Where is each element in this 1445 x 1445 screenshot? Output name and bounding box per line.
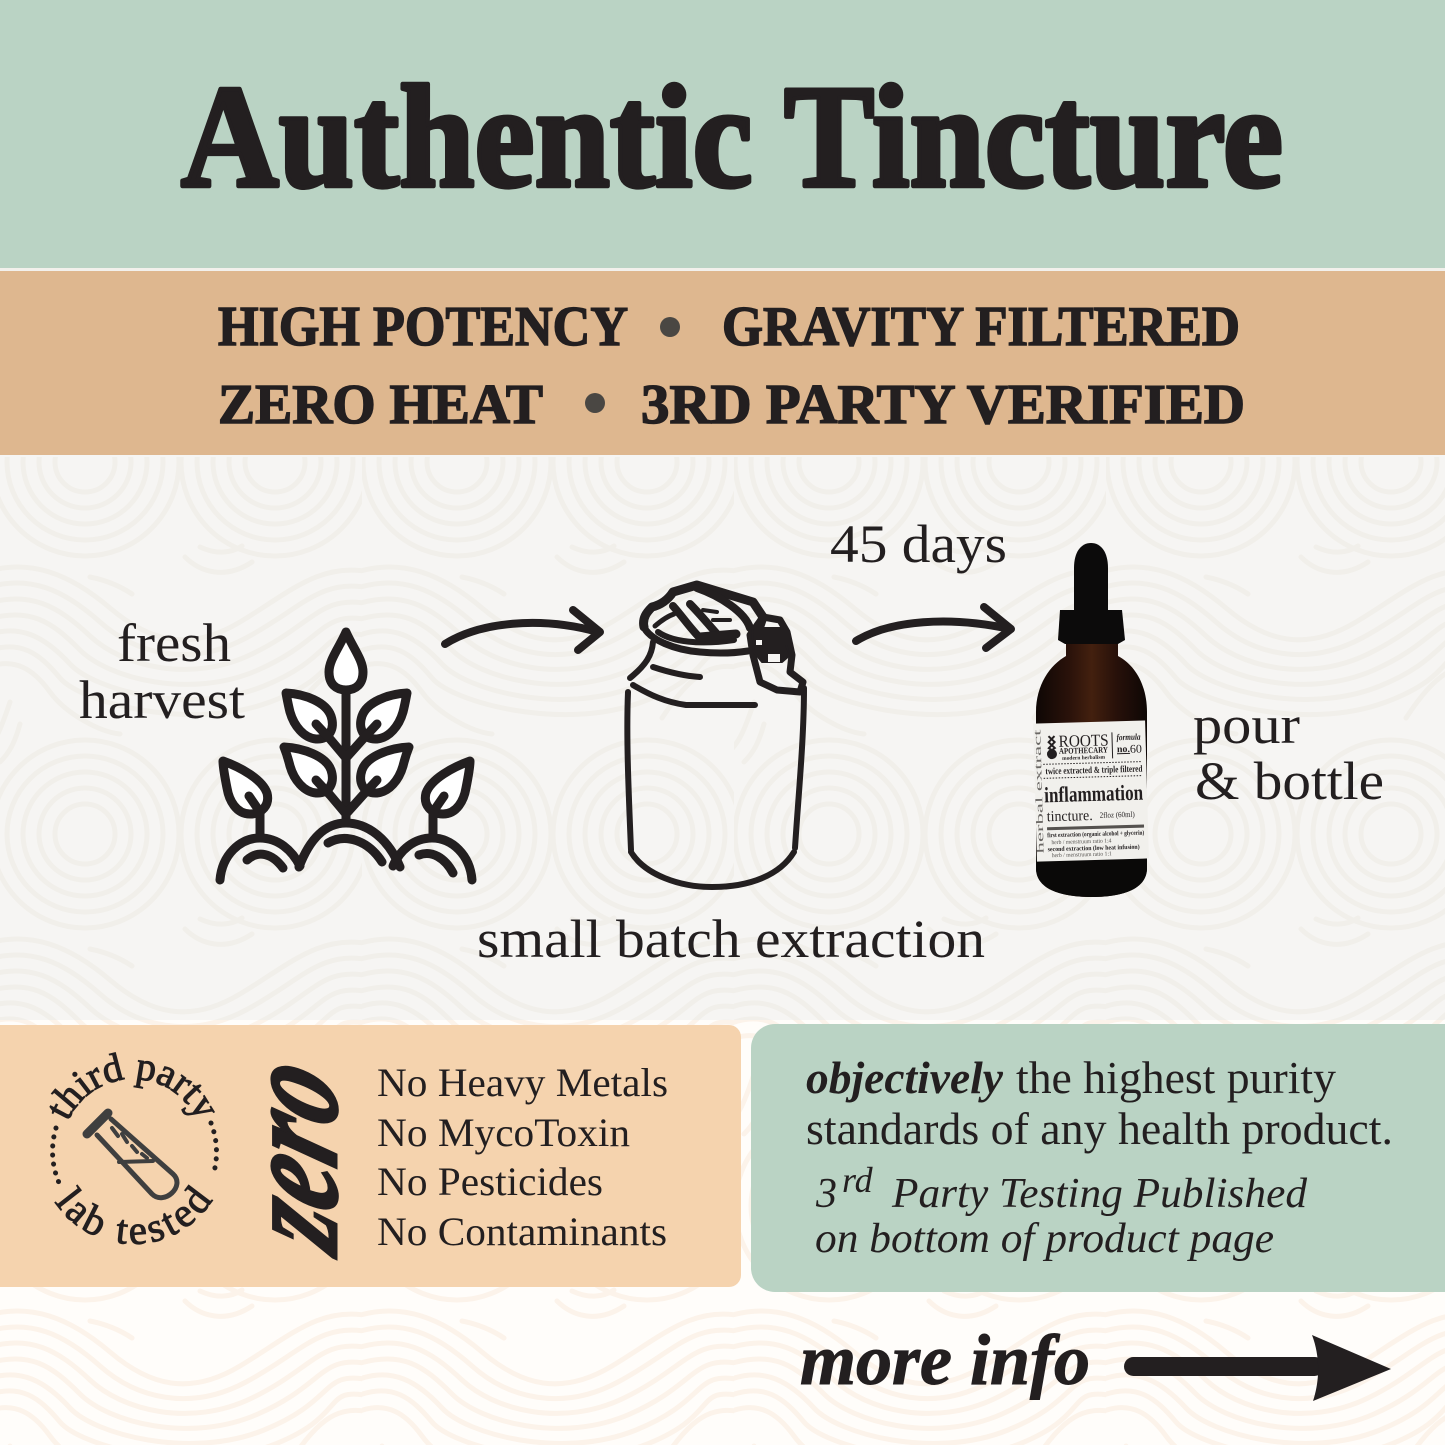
list: no contaminants: No Pesticides bbox=[377, 1159, 603, 1204]
panel: purity standards: on bottom of product page bbox=[815, 1216, 1274, 1262]
script word: zero: zero bbox=[216, 1039, 366, 1269]
band: product attributes: ZERO HEAT bbox=[218, 374, 543, 436]
list: no contaminants bbox=[377, 1060, 668, 1254]
product label: 60 bbox=[1130, 742, 1142, 756]
panel: purity standards bbox=[751, 1024, 1445, 1292]
list: no contaminants: No Heavy Metals bbox=[377, 1060, 668, 1105]
band: product attributes: GRAVITY FILTERED bbox=[722, 296, 1240, 358]
product label: tincture. bbox=[1047, 808, 1093, 825]
list: no contaminants: No Contaminants bbox=[377, 1209, 667, 1254]
label: fresh harvest: harvest bbox=[79, 670, 245, 730]
label: pour & bottle: pour bbox=[1193, 695, 1300, 755]
page background: process section bbox=[0, 455, 1445, 1445]
label: small batch extraction: small batch extraction bbox=[477, 909, 985, 969]
label: pour & bottle: & bottle bbox=[1195, 751, 1384, 811]
product label: no. bbox=[1117, 744, 1131, 755]
panel: zero contaminants bbox=[0, 1025, 741, 1287]
product label: formula bbox=[1116, 732, 1141, 742]
product label: herb / menstruum ratio 1:4 bbox=[1051, 838, 1112, 846]
arrow: more info bbox=[1124, 1335, 1391, 1401]
list: no contaminants: No MycoToxin bbox=[377, 1110, 630, 1155]
band: product attributes bbox=[0, 268, 1445, 455]
label: fresh harvest: fresh bbox=[117, 613, 231, 673]
panel: purity standards: the highest purity bbox=[1016, 1052, 1336, 1103]
product label: APOTHECARY bbox=[1059, 745, 1108, 756]
product label: ROOTS bbox=[1058, 731, 1109, 751]
product label: herb / menstruum ratio 1:1 bbox=[1052, 851, 1112, 859]
header panel with title bbox=[0, 0, 1445, 268]
band: product attributes: HIGH POTENCY bbox=[218, 296, 628, 358]
badge: third party lab tested: third party bbox=[49, 1052, 215, 1119]
product label bbox=[1032, 720, 1149, 862]
panel: purity standards: Party Testing Published bbox=[891, 1171, 1308, 1217]
badge: third party lab tested: lab tested bbox=[54, 1184, 214, 1245]
band: product attributes: 3RD PARTY VERIFIED bbox=[641, 374, 1245, 436]
product label: second extraction (low heat infusion) bbox=[1048, 844, 1140, 853]
arrow: extraction to bottle bbox=[856, 607, 1011, 648]
icon: sealed extraction jar bbox=[627, 585, 804, 887]
label: 45 days: 45 days bbox=[830, 514, 1007, 574]
product label: first extraction (organic alcohol + glycerin) bbox=[1047, 830, 1144, 839]
product label: twice extracted & triple filtered bbox=[1045, 765, 1143, 777]
product label: modern herbalism bbox=[1062, 755, 1106, 762]
product label: herbal extract bbox=[1032, 729, 1047, 854]
panel: purity standards: rd bbox=[842, 1160, 874, 1200]
label: pour & bottle bbox=[1193, 695, 1384, 811]
call to action: more info: more info bbox=[800, 1320, 1090, 1400]
header panel with title: Authentic Tincture bbox=[181, 55, 1283, 218]
product photo: tincture bottle bbox=[1032, 543, 1149, 897]
product label: 2floz (60ml) bbox=[1100, 810, 1135, 820]
arrow: harvest to extraction bbox=[445, 610, 600, 650]
panel: purity standards: 3 bbox=[815, 1171, 837, 1217]
badge: third party lab tested bbox=[49, 1052, 219, 1245]
panel: purity standards: objectively bbox=[806, 1052, 1004, 1103]
icon: sprouting plants bbox=[220, 632, 472, 880]
label: fresh harvest bbox=[79, 613, 245, 730]
product label: inflammation bbox=[1044, 780, 1143, 807]
panel: purity standards: standards of any health product. bbox=[806, 1103, 1393, 1154]
